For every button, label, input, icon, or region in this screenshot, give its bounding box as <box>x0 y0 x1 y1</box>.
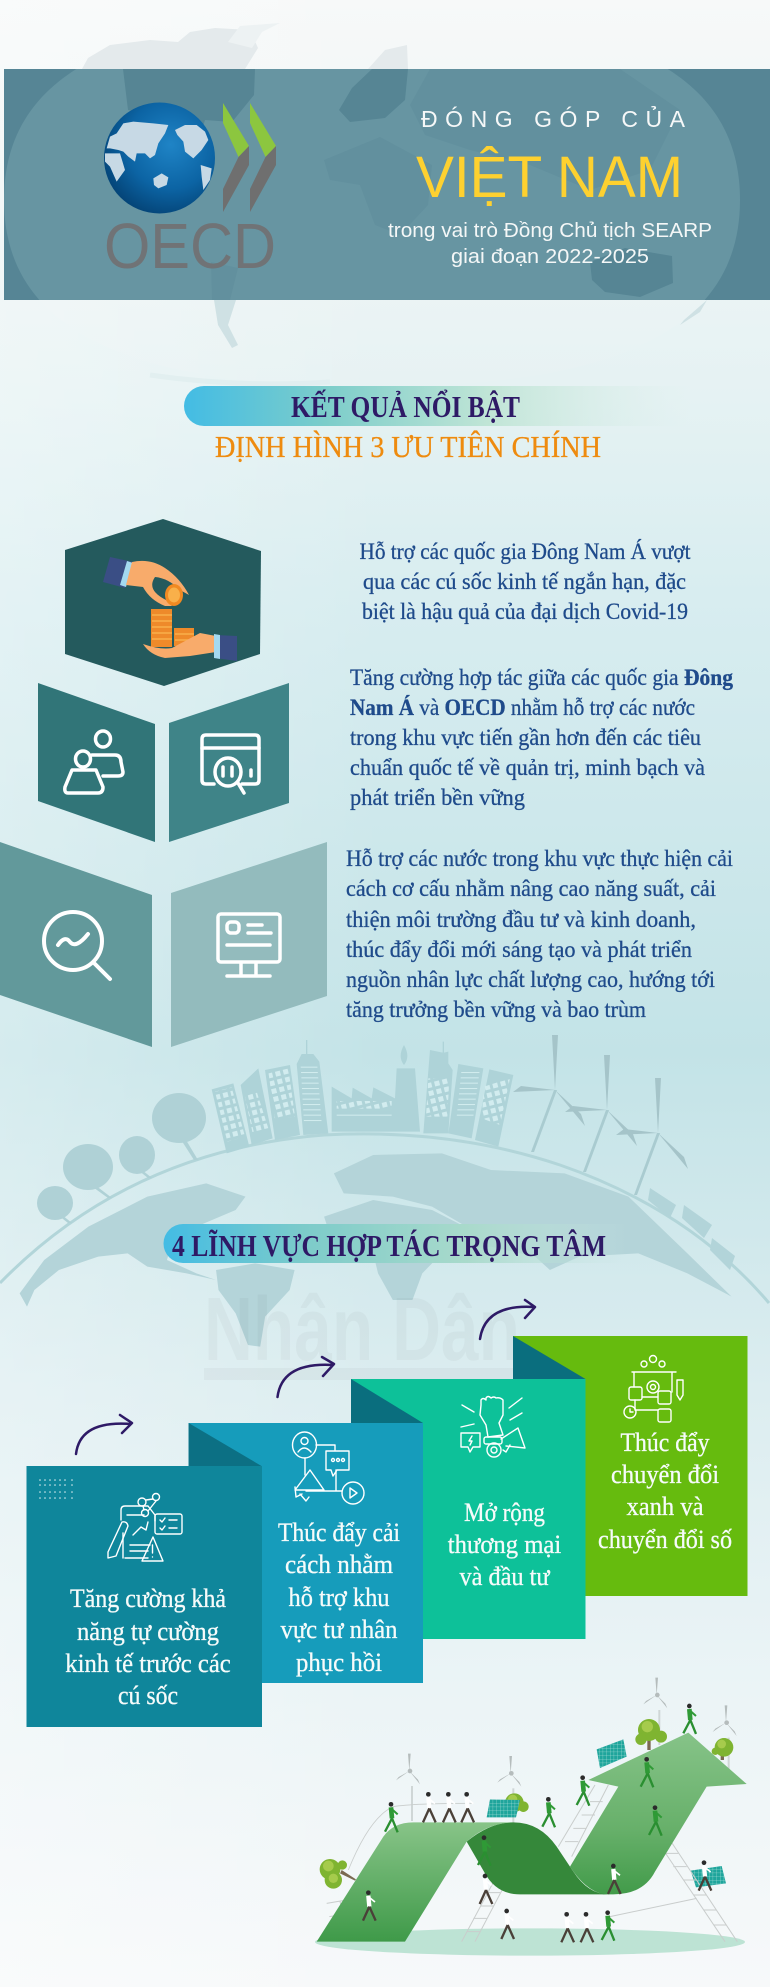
trees <box>320 1719 733 1889</box>
banner title: VIỆT NAM <box>416 145 683 210</box>
icon: raised fist and megaphone <box>461 1396 525 1457</box>
OECD wordmark: OECD <box>104 210 276 282</box>
arrow: step 1 to 2 <box>76 1415 132 1454</box>
step 2 text: phục hồi <box>296 1648 382 1677</box>
step 4 text <box>598 1428 732 1554</box>
hexagon: coins and hands <box>65 519 261 686</box>
step 1 text: Tăng cường khả <box>70 1584 226 1613</box>
step 4 text: chuyển đổi <box>611 1460 719 1489</box>
subheading text: ĐỊNH HÌNH 3 ƯU TIÊN CHÍNH <box>215 429 601 464</box>
chevrons <box>223 103 276 212</box>
step 3 text: thương mại <box>448 1530 561 1559</box>
text block: priority 1: biệt là hậu quả của đại dịch Covid-19 <box>362 599 688 624</box>
ladders <box>327 1785 737 1942</box>
panel: step 4 green and digital transition <box>513 1336 748 1596</box>
map continents <box>20 1153 732 1347</box>
text block: priority 3: Hỗ trợ các nước trong khu vực thực hiện cải <box>346 846 733 871</box>
left ribbon <box>317 1822 513 1942</box>
banner background <box>4 69 770 300</box>
city buildings <box>212 1040 513 1153</box>
step 2 text: vực tư nhân <box>280 1615 398 1644</box>
heading text: 4 LĨNH VỰC HỢP TÁC TRỌNG TÂM <box>172 1228 606 1263</box>
step 3 text: và đầu tư <box>460 1562 550 1591</box>
right rising ribbon with arrowhead <box>570 1733 747 1894</box>
panel: people icon <box>38 683 155 842</box>
heading: 4 focus areas <box>164 1224 630 1263</box>
step 4 text: chuyển đổi số <box>598 1525 732 1554</box>
text block: priority 1 <box>360 539 691 624</box>
banner title <box>388 104 712 268</box>
illustration: green growth arrow with people <box>315 1678 747 1956</box>
text block: priority 3: tăng trưởng bền vững và bao trùm <box>346 997 646 1022</box>
pill background <box>184 386 690 426</box>
watermark: green city on globe <box>0 1035 769 1347</box>
text block: priority 2: trong khu vực tiến gần hơn đến các tiêu <box>350 725 701 750</box>
panel: magnifier chart icon <box>0 842 152 1047</box>
arrow: step 2 to 3 <box>278 1357 334 1397</box>
panel: window search icon <box>169 683 289 842</box>
text block: priority 2: phát triển bền vững <box>350 785 525 810</box>
pill background <box>164 1224 630 1263</box>
globe <box>104 102 215 214</box>
banner title: trong vai trò Đồng Chủ tịch SEARP <box>388 220 712 242</box>
step 3 text <box>448 1498 561 1591</box>
arrow: step 3 to 4 <box>480 1300 535 1339</box>
text block: priority 3: thiện môi trường đầu tư và kinh doanh, <box>346 907 696 932</box>
watermark: top globe <box>4 13 740 387</box>
step 1 text <box>65 1584 231 1710</box>
heading: key results <box>184 386 690 464</box>
text block: priority 2: chuẩn quốc tế về quản trị, minh bạch và <box>350 755 705 780</box>
step 1 text: kinh tế trước các <box>65 1649 231 1678</box>
step 2 text <box>278 1518 400 1677</box>
text block: priority 2 <box>350 665 733 810</box>
icon: risk report <box>108 1494 182 1561</box>
step 2 text: Thúc đẩy cải <box>278 1518 400 1547</box>
text block: priority 1: qua các cú sốc kinh tế ngắn hạn, đặc <box>363 569 686 594</box>
heading text: KẾT QUẢ NỔI BẬT <box>291 388 520 424</box>
watermark: newspaper name: Nhân Dân <box>204 1280 520 1380</box>
text block: priority 3: nguồn nhân lực chất lượng cao, hướng tới <box>346 967 715 992</box>
panel: monitor icon <box>171 842 327 1047</box>
wind turbines and solar panels <box>513 1035 735 1270</box>
step 2 text: hỗ trợ khu <box>288 1583 390 1612</box>
step 3 text: Mở rộng <box>464 1498 545 1527</box>
dark middle ribbon <box>467 1822 608 1894</box>
banner title: giai đoạn 2022-2025 <box>451 246 649 268</box>
step 2 text: cách nhằm <box>285 1550 393 1579</box>
icon: people, chat and video <box>292 1432 364 1504</box>
step 1 text: năng tự cường <box>77 1617 219 1646</box>
wind turbines <box>396 1678 737 1823</box>
text block: priority 1: Hỗ trợ các quốc gia Đông Nam Á vượt <box>360 539 691 564</box>
icon: process diagram <box>624 1356 683 1422</box>
dot grid <box>39 1479 73 1499</box>
panel: step 3 trade and investment <box>351 1379 586 1639</box>
ground ellipse <box>315 1928 745 1956</box>
solar panels <box>487 1739 726 1887</box>
panel: hexagon icon cluster <box>0 519 327 1047</box>
step 4 text: Thúc đẩy <box>620 1428 710 1457</box>
header banner <box>4 69 770 300</box>
text block: priority 3: thúc đẩy đổi mới sáng tạo và phát triển <box>346 937 692 962</box>
trees <box>37 1093 206 1223</box>
text block: priority 2: Nam Á và OECD nhằm hỗ trợ các nước <box>350 695 695 720</box>
panel: step 1 economic resilience <box>26 1466 262 1727</box>
text block: priority 2: Tăng cường hợp tác giữa các quốc gia Đông <box>350 665 733 690</box>
banner title: ĐÓNG GÓP CỦA <box>421 104 686 132</box>
workers <box>363 1704 711 1942</box>
text block: priority 3: cách cơ cấu nhằm nâng cao năng suất, cải <box>346 876 716 901</box>
panel: step 2 private sector recovery <box>189 1423 423 1683</box>
OECD logo <box>104 102 276 282</box>
step 1 text: cú sốc <box>118 1681 178 1710</box>
text block: priority 3 <box>346 846 733 1022</box>
step 4 text: xanh và <box>626 1492 704 1521</box>
